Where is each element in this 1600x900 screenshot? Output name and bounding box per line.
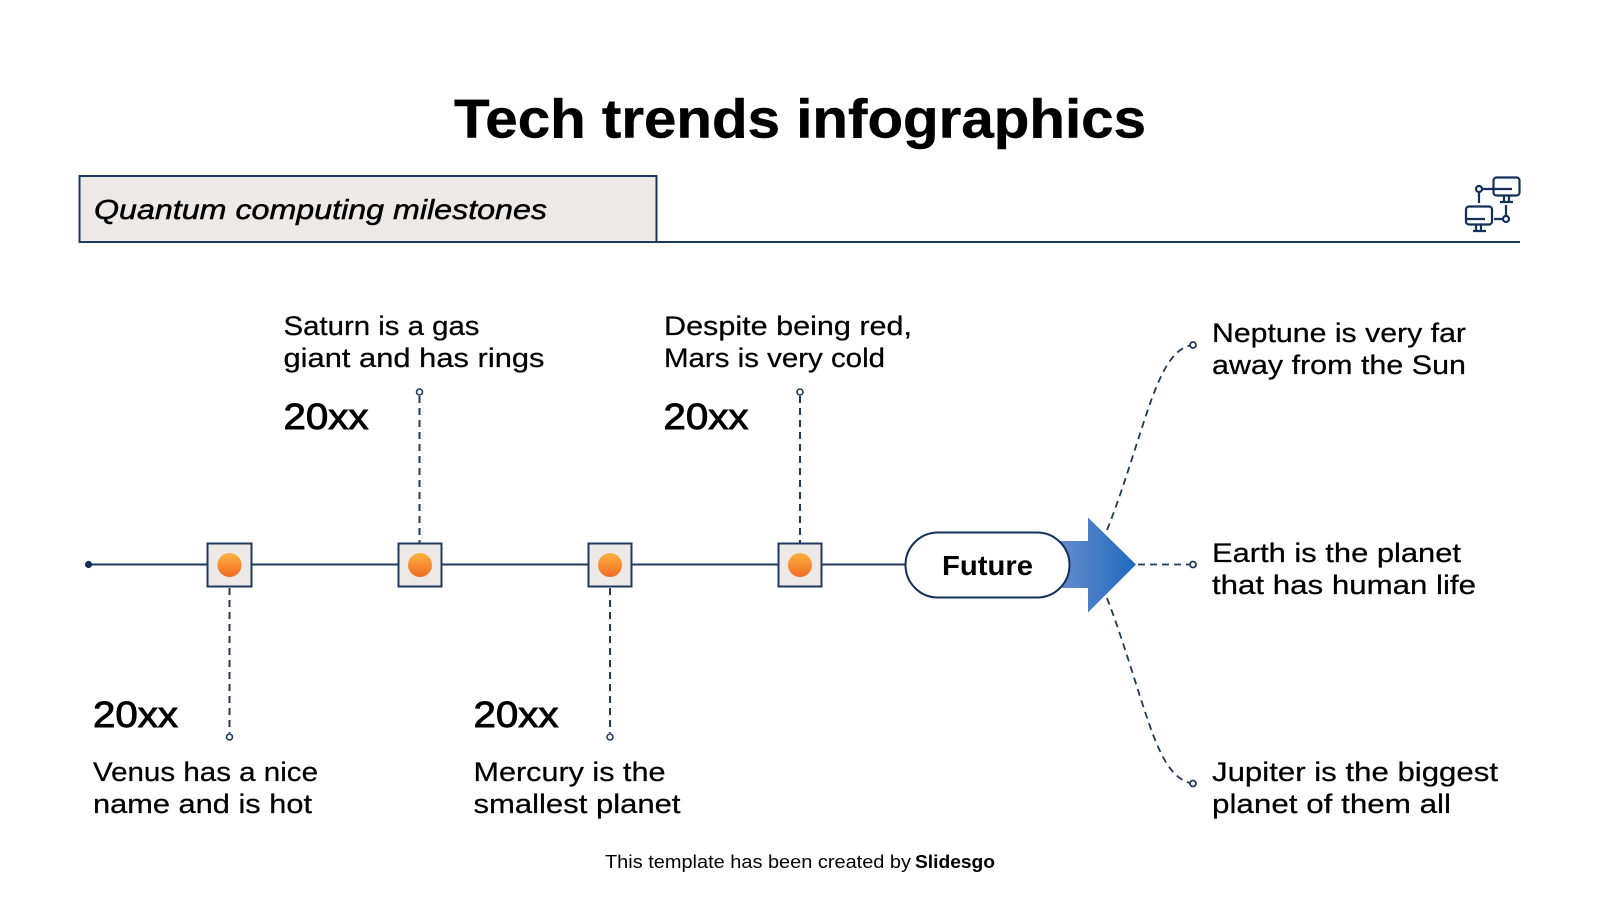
text: Venus milestone <box>93 694 318 819</box>
text: Jupiter <box>1212 757 1499 819</box>
connector: Saturn <box>416 389 422 543</box>
marker: Mars <box>778 544 822 586</box>
text: Mercury milestone: 20xx <box>474 694 558 735</box>
text: Venus milestone: 20xx <box>93 694 178 735</box>
header panel: subtitle box <box>80 176 656 242</box>
subtitle: Quantum computing milestones <box>94 194 547 225</box>
header rule <box>368 241 1520 243</box>
text: Mars milestone: Mars is very cold <box>664 343 885 373</box>
text: Mars milestone <box>664 311 912 437</box>
text: Mercury milestone: smallest planet <box>474 789 681 819</box>
text: Neptune <box>1212 318 1466 380</box>
marker: Mercury <box>588 544 632 586</box>
text: Saturn milestone: Saturn is a gas <box>284 311 480 341</box>
text: Earth: Earth is the planet <box>1212 538 1462 568</box>
future pill: Future <box>942 550 1033 581</box>
text: Earth <box>1212 538 1476 600</box>
text: Venus milestone: name and is hot <box>93 789 313 819</box>
text: Jupiter: Jupiter is the biggest <box>1212 757 1499 787</box>
branch: line to Earth <box>1138 562 1196 568</box>
branch: curve down to Jupiter <box>1107 598 1196 786</box>
text: Neptune: Neptune is very far <box>1212 318 1466 348</box>
text: Mars milestone: Despite being red, <box>664 311 912 341</box>
future pill <box>906 532 1070 598</box>
connector: Venus <box>226 588 232 740</box>
arrow <box>1050 518 1136 612</box>
text: Earth: that has human life <box>1212 570 1476 600</box>
text: Mercury milestone <box>474 694 681 819</box>
text: Saturn milestone <box>284 311 544 437</box>
footer credit: Slidesgo <box>915 852 995 872</box>
marker: Venus <box>208 544 252 586</box>
title: Tech trends infographics <box>454 88 1146 150</box>
text: Mercury milestone: Mercury is the <box>474 757 666 787</box>
text: Saturn milestone: 20xx <box>284 396 368 437</box>
text: Jupiter: planet of them all <box>1212 789 1451 819</box>
text: Mars milestone: 20xx <box>664 396 748 437</box>
icon: networked computers <box>1466 178 1520 231</box>
connector: Mars <box>797 389 803 543</box>
text: Neptune: away from the Sun <box>1212 350 1466 380</box>
timeline axis <box>85 561 905 568</box>
text: Venus milestone: Venus has a nice <box>93 757 318 787</box>
branch: curve up to Neptune <box>1107 342 1196 530</box>
connector: Mercury <box>607 588 613 740</box>
text: Saturn milestone: giant and has rings <box>284 343 544 373</box>
footer credit: This template has been created by <box>605 852 911 872</box>
marker: Saturn <box>398 544 442 586</box>
